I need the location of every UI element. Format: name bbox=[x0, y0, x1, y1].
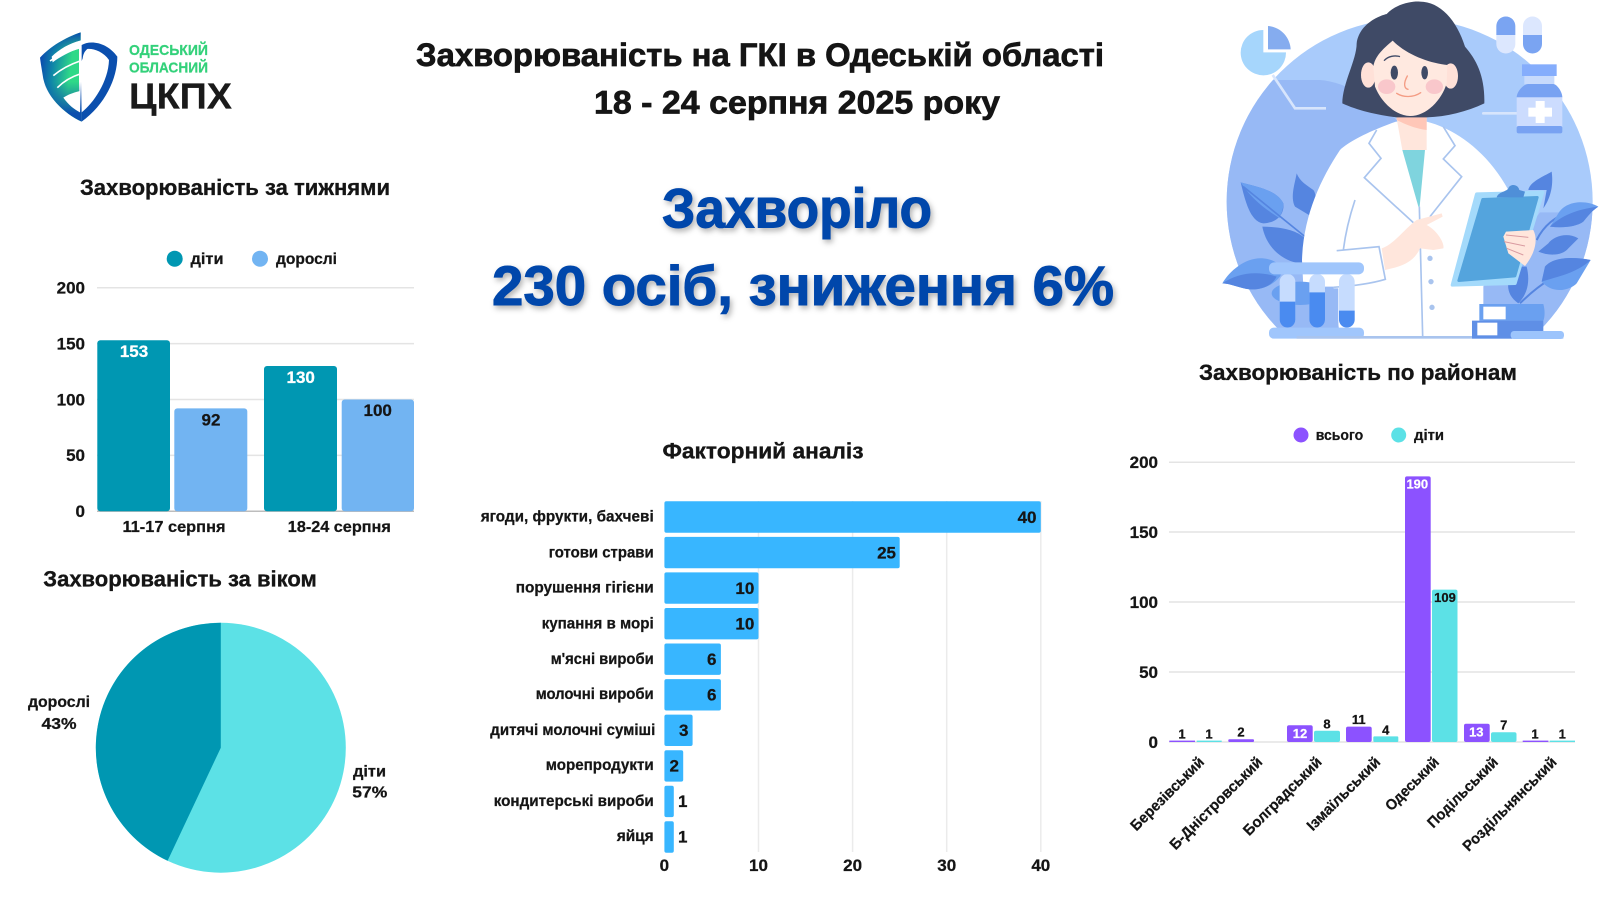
y axis: 0 bbox=[1149, 733, 1158, 752]
data labels: 1 bbox=[678, 828, 687, 846]
x axis: 30 bbox=[937, 856, 956, 875]
category labels: м'ясні вироби bbox=[551, 651, 654, 668]
category labels: дитячі молочні суміші bbox=[490, 722, 655, 739]
logo text: ЦКПХ bbox=[129, 76, 232, 116]
x axis labels bbox=[122, 519, 391, 536]
data labels bbox=[120, 342, 392, 430]
x axis labels: Ізмаїльський bbox=[1304, 754, 1384, 834]
y axis: 200 bbox=[1130, 453, 1158, 472]
data labels: 11 bbox=[1352, 712, 1366, 727]
legend bbox=[1294, 427, 1444, 444]
label: adults bbox=[28, 694, 90, 733]
data labels: 40 bbox=[1018, 508, 1036, 527]
x axis: 40 bbox=[1031, 856, 1050, 875]
label: children: діти bbox=[353, 764, 386, 780]
y axis: 150 bbox=[57, 334, 85, 353]
x axis labels: Болградський bbox=[1240, 754, 1326, 839]
category labels: купання в морі bbox=[542, 616, 654, 632]
panel: factor analysis chart bbox=[481, 438, 1050, 875]
data labels: 130 bbox=[287, 368, 315, 387]
x axis labels: Б-Дністровський bbox=[1166, 754, 1266, 854]
x axis labels bbox=[1127, 754, 1561, 855]
y axis: 50 bbox=[1139, 663, 1158, 682]
title: Захворюваність на ГКІ в Одеській області bbox=[416, 37, 1104, 73]
label: adults: 43% bbox=[42, 716, 77, 733]
heading: Захворюваність за тижнями bbox=[80, 175, 390, 200]
data labels: 25 bbox=[877, 544, 896, 562]
data labels: 1 bbox=[1178, 726, 1186, 741]
y axis: 0 bbox=[76, 502, 85, 521]
category labels bbox=[481, 508, 655, 845]
x axis labels: Одеський bbox=[1382, 754, 1443, 815]
y axis bbox=[57, 278, 85, 521]
illustration: doctor bbox=[1222, 2, 1598, 339]
y axis: 200 bbox=[57, 278, 85, 298]
logo bbox=[40, 32, 232, 122]
data labels: 190 bbox=[1406, 477, 1428, 492]
headline: total cases: 230 осіб, зниження 6% bbox=[492, 254, 1114, 317]
legend: дорослі bbox=[276, 251, 337, 268]
data labels: 10 bbox=[735, 614, 754, 634]
bars bbox=[664, 501, 1041, 853]
icon: pills bbox=[1496, 16, 1542, 53]
data labels bbox=[1178, 477, 1566, 741]
data labels: 8 bbox=[1323, 716, 1331, 731]
pie bbox=[96, 623, 346, 873]
heading: Захворюваність по районам bbox=[1199, 360, 1517, 385]
legend bbox=[167, 251, 337, 268]
icon: bottle bbox=[1483, 64, 1562, 133]
heading: Факторний аналіз bbox=[662, 438, 864, 463]
x axis bbox=[660, 856, 1050, 875]
category labels: ягоди, фрукти, бахчеві bbox=[481, 508, 654, 526]
logo text: ОДЕСЬКИЙ bbox=[129, 41, 208, 59]
data labels: 4 bbox=[1382, 722, 1390, 737]
y axis: 100 bbox=[57, 390, 85, 409]
data labels: 1 bbox=[1205, 726, 1213, 741]
headline: total cases bbox=[492, 176, 1114, 317]
category labels: готови страви bbox=[549, 544, 654, 562]
legend: діти bbox=[1414, 427, 1444, 444]
legend: всього bbox=[1316, 427, 1363, 444]
data labels: 1 bbox=[678, 792, 687, 811]
x axis: 20 bbox=[843, 856, 862, 875]
logo text bbox=[129, 41, 232, 116]
data labels: 2 bbox=[1237, 725, 1245, 740]
books bbox=[1472, 304, 1564, 339]
data labels: 12 bbox=[1293, 726, 1307, 741]
x axis labels: Подільський bbox=[1424, 754, 1502, 832]
legend: діти bbox=[190, 251, 224, 268]
icon: shield bbox=[40, 32, 117, 122]
category labels: молочні вироби bbox=[536, 686, 654, 703]
x axis labels: 18-24 серпня bbox=[288, 519, 391, 536]
data labels: 6 bbox=[707, 650, 716, 669]
data labels: 92 bbox=[202, 410, 220, 430]
panel: districts chart bbox=[1127, 360, 1575, 855]
heading: Захворюваність за віком bbox=[43, 567, 317, 592]
category labels: яйця bbox=[617, 828, 654, 845]
data labels: 7 bbox=[1500, 718, 1507, 733]
bars bbox=[97, 340, 414, 511]
y axis: 50 bbox=[66, 446, 85, 465]
panel: age pie chart bbox=[28, 567, 388, 873]
category labels: порушення гігієни bbox=[516, 580, 654, 596]
data labels: 3 bbox=[679, 721, 688, 740]
panel: weekly chart bbox=[57, 175, 414, 536]
hand and clipboard bbox=[1382, 185, 1543, 285]
data labels: 153 bbox=[120, 342, 148, 361]
headline: total cases: Захворіло bbox=[662, 176, 932, 240]
y axis: 100 bbox=[1130, 593, 1158, 612]
title bbox=[416, 37, 1104, 120]
category labels: кондитерські вироби bbox=[494, 793, 654, 810]
x axis: 10 bbox=[749, 856, 768, 875]
data labels: 2 bbox=[670, 756, 679, 776]
x axis labels: 11-17 серпня bbox=[122, 519, 226, 536]
y axis: 150 bbox=[1130, 523, 1158, 542]
data labels: 1 bbox=[1559, 726, 1566, 741]
data labels bbox=[670, 508, 1036, 846]
y axis bbox=[1130, 453, 1158, 752]
title: 18 - 24 серпня 2025 року bbox=[594, 84, 1000, 120]
data labels: 100 bbox=[364, 401, 392, 420]
logo text: ОБЛАСНИЙ bbox=[129, 58, 208, 76]
icon: pie bbox=[1241, 26, 1326, 108]
label: children bbox=[352, 764, 388, 802]
test tubes bbox=[1269, 262, 1563, 339]
right plant bbox=[1508, 172, 1598, 303]
data labels: 13 bbox=[1469, 724, 1484, 739]
data labels: 109 bbox=[1434, 590, 1456, 605]
left plant bbox=[1222, 173, 1316, 289]
data labels: 6 bbox=[707, 686, 716, 704]
category labels: морепродукти bbox=[546, 757, 654, 774]
bars: total bbox=[1169, 476, 1548, 742]
label: children: 57% bbox=[352, 784, 388, 802]
x axis labels: Березівський bbox=[1127, 754, 1208, 834]
label: adults: дорослі bbox=[28, 694, 90, 711]
coat bbox=[1302, 115, 1508, 337]
x axis: 0 bbox=[660, 856, 669, 875]
x axis labels: Роздільнянський bbox=[1459, 754, 1561, 855]
head bbox=[1342, 2, 1484, 117]
data labels: 1 bbox=[1531, 726, 1539, 741]
data labels: 10 bbox=[735, 579, 754, 598]
bars: children bbox=[1197, 590, 1575, 742]
